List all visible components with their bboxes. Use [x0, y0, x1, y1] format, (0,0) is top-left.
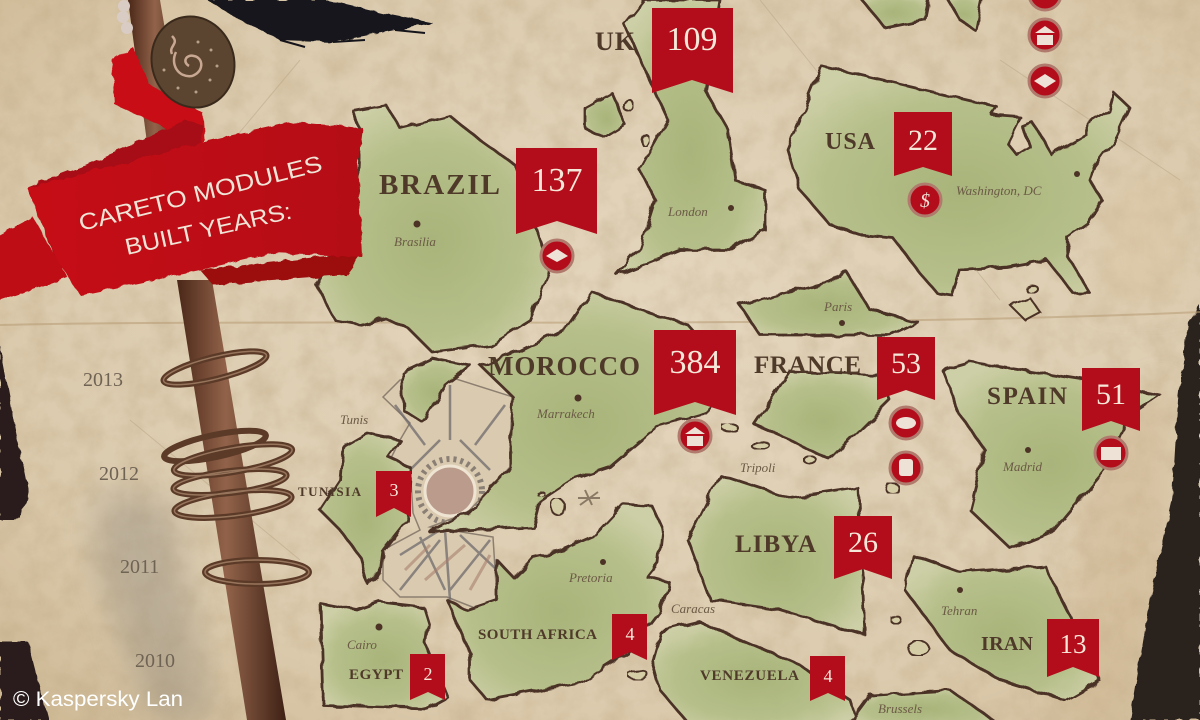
capital labels: Pretoria — [568, 570, 613, 585]
icon badges — [541, 0, 1127, 484]
flag: UK 109: 109 — [666, 21, 718, 58]
country labels: SOUTH AFRICA — [478, 627, 598, 643]
year axis labels: 2010 — [135, 650, 175, 672]
country labels: LIBYA — [735, 531, 817, 558]
year axis labels — [83, 369, 175, 672]
country labels: FRANCE — [754, 352, 862, 379]
capital labels: Madrid — [1002, 459, 1042, 474]
flag: Brazil 137 — [516, 148, 597, 234]
country labels: UK — [595, 27, 636, 56]
year axis labels: 2013 — [83, 369, 123, 391]
flag: South Africa 4: 4 — [626, 624, 634, 644]
year axis labels: 2012 — [99, 463, 139, 485]
flag: Venezuela 4: 4 — [824, 666, 832, 686]
country labels: EGYPT — [349, 667, 404, 683]
capital labels: Paris — [823, 299, 852, 314]
flag: Spain 51: 51 — [1096, 378, 1126, 411]
flag: Venezuela 4 — [810, 656, 845, 701]
country labels: MOROCCO — [488, 351, 641, 381]
map: USA — [788, 66, 1130, 320]
flag: South Africa 4 — [612, 614, 647, 660]
country labels — [298, 27, 1068, 684]
capital labels: Marrakech — [536, 406, 595, 421]
banner: Careto modules built years — [27, 122, 363, 295]
flag: France 53: 53 — [891, 347, 921, 380]
flag: Egypt 2 — [410, 654, 445, 700]
map: top islands — [858, 0, 982, 30]
map: Libya — [688, 475, 865, 635]
flag: Egypt 2: 2 — [424, 664, 432, 684]
flag: Libya 26 — [834, 516, 892, 579]
flag: USA 22: 22 — [908, 124, 938, 157]
country labels: BRAZIL — [379, 169, 501, 201]
country labels: IRAN — [981, 633, 1034, 655]
banner: Careto modules built years: BUILT YEARS: — [122, 198, 294, 260]
capital labels: Tehran — [941, 603, 977, 618]
red scarf behind — [0, 47, 362, 300]
flag: Iran 13: 13 — [1060, 629, 1086, 659]
capital labels: Brussels — [878, 701, 922, 716]
capital labels: Cairo — [347, 637, 377, 652]
capital labels — [340, 171, 1080, 716]
flag: USA 22 — [894, 112, 952, 176]
country labels: TUNISIA — [298, 484, 362, 499]
flag: UK 109 — [652, 8, 733, 93]
map: South Africa — [447, 505, 670, 700]
flag: Morocco 384: 384 — [670, 344, 720, 381]
small islands — [537, 99, 929, 680]
map: Spain — [942, 362, 1160, 548]
flag: Tunisia 3: 3 — [390, 480, 398, 500]
map: Brazil — [316, 104, 550, 422]
country labels: USA — [825, 129, 876, 155]
flag: Libya 26: 26 — [848, 526, 878, 559]
map: Tunisia — [320, 433, 410, 583]
flag: Tunisia 3 — [376, 471, 411, 517]
map: UK — [585, 0, 765, 275]
stone pendant — [140, 6, 246, 118]
flag: Brazil 137: 137 — [532, 162, 582, 199]
flag: Morocco 384 — [654, 330, 736, 415]
capital labels: London — [667, 204, 708, 219]
map: Iran — [905, 555, 1100, 700]
credit: © Kaspersky Lan — [13, 688, 183, 711]
compass rose — [383, 378, 513, 610]
flag: France 53 — [877, 337, 935, 400]
black feather — [207, 0, 433, 47]
icon badges: $ — [920, 190, 930, 212]
flag: Spain 51 — [1082, 368, 1140, 431]
shaman staff — [128, 0, 309, 720]
map: Venezuela — [652, 622, 858, 720]
map: Belgium — [850, 690, 1000, 720]
capital labels: Washington, DC — [956, 183, 1042, 198]
rings — [161, 345, 309, 584]
capital labels: Brasilia — [394, 234, 436, 249]
map: France — [740, 270, 918, 460]
capital labels: Caracas — [671, 601, 715, 616]
capital labels: Tunis — [340, 412, 368, 427]
banner: Careto modules built years: CARETO MODULES — [76, 150, 325, 236]
country labels: VENEZUELA — [700, 668, 800, 684]
year axis labels: 2011 — [120, 556, 159, 578]
capital labels: Tripoli — [740, 460, 776, 475]
map: Egypt — [320, 602, 447, 708]
map: Morocco — [430, 292, 735, 532]
country labels: SPAIN — [987, 383, 1068, 410]
beads — [117, 0, 133, 34]
flag: Iran 13 — [1047, 619, 1099, 677]
